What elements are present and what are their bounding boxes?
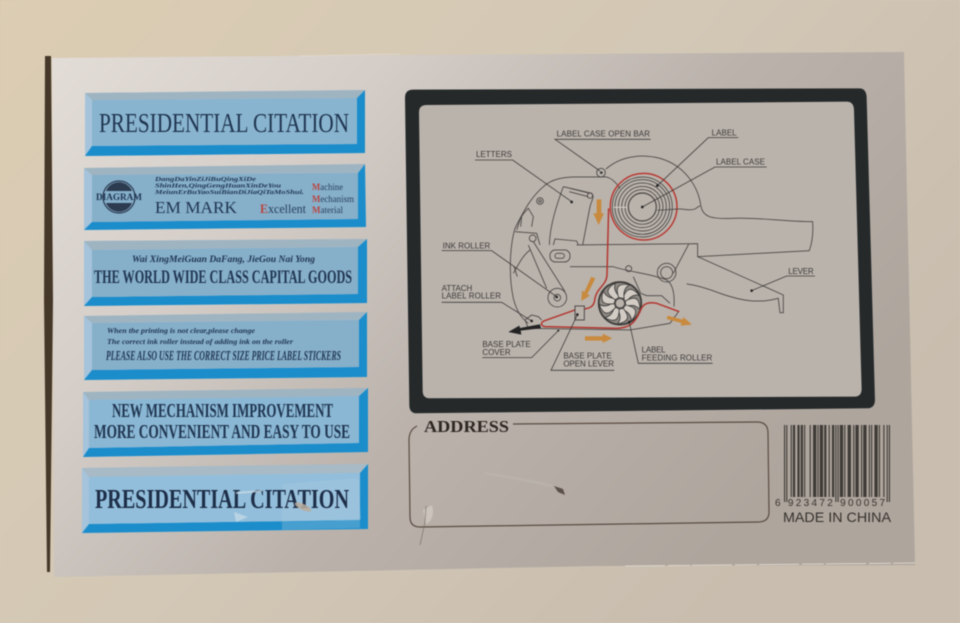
panel: address box [409, 417, 769, 527]
callout: label case [641, 158, 767, 208]
arrow: label out [508, 324, 541, 335]
warning text: PLEASE ALSO USE THE CORRECT SIZE PRICE LABEL STICKERS [106, 349, 341, 364]
subtitle: Wai XingMeiGuan DaFang, JieGou Nai Yong [132, 255, 315, 265]
heading: new mechanism improvement [94, 400, 350, 443]
open lever [575, 306, 584, 320]
callout: base plate cover: COVER [482, 348, 511, 357]
callout: label feeding roller: FEEDING ROLLER [642, 354, 713, 363]
callout: base plate open lever: BASE PLATE [563, 351, 612, 360]
feed wheel [597, 280, 644, 327]
callout: lever [750, 267, 815, 292]
tagline: excellent machine mechanism material: Material [312, 206, 343, 216]
small romanised text: ShinHen,QingGengHuanXinDeYou [155, 184, 282, 190]
callout: attach label roller: LABEL ROLLER [442, 291, 501, 300]
tagline: excellent machine mechanism material: Mechanism [312, 195, 355, 205]
callout: label [656, 128, 738, 187]
callout: base plate cover [482, 330, 559, 358]
made in china text: MADE IN CHINA [783, 509, 892, 525]
label paper path [542, 208, 679, 328]
icon: diagram logo [96, 181, 143, 213]
panel: presidential citation label [85, 90, 365, 156]
label roll [610, 173, 678, 240]
callout: base plate open lever [551, 313, 614, 370]
callout: letters [475, 150, 573, 203]
barcode [775, 425, 890, 509]
instruction text: When the printing is not clear,please change [107, 326, 256, 335]
callout: label: LABEL [712, 128, 737, 137]
heading: world wide class capital goods: THE WORLD WIDE CLASS CAPITAL GOODS [94, 267, 352, 288]
box panel [44, 52, 915, 577]
brand: em mark: EM MARK [155, 198, 238, 217]
panel: world wide class label [84, 239, 367, 306]
arrow: diagonal down [581, 277, 595, 301]
small romanised text: DangDaYinZiJiBuQingXiDe [154, 177, 256, 183]
tagline: excellent machine mechanism material [260, 183, 355, 216]
callout: label feeding roller [628, 321, 713, 363]
callout: attach label roller [442, 284, 533, 322]
callout: attach label roller: ATTACH [442, 284, 473, 293]
heading: new mechanism improvement: MORE CONVENIENT AND EASY TO USE [94, 421, 350, 443]
instruction text: The correct ink roller instead of adding ink on the roller [107, 337, 293, 346]
callout: base plate open lever: OPEN LEVER [563, 360, 614, 369]
callout: base plate cover: BASE PLATE [482, 340, 531, 349]
panel: new mechanism label [83, 388, 368, 457]
tagline: excellent machine mechanism material: Excellent [260, 202, 306, 216]
small romanised text: MeiunErBuYaoSuiBianDiJiaQiTaMoShui. [154, 190, 305, 196]
barcode number: 6 923472 900057 [775, 498, 885, 509]
panel: em mark label [84, 164, 366, 230]
arrow: exit right [667, 316, 692, 326]
callout: label case open bar: LABEL CASE OPEN BAR [557, 130, 650, 139]
heading: presidential citation bold: PRESIDENTIAL CITATION [95, 484, 349, 514]
icon: diagram logo: DIAGRAM [96, 192, 143, 202]
scuff marks [420, 473, 565, 545]
heading: presidential citation: PRESIDENTIAL CITATION [99, 108, 349, 138]
callout: label case: LABEL CASE [716, 158, 765, 167]
panel: mechanism diagram [405, 88, 875, 413]
panel: ink roller instructions label [84, 312, 367, 380]
heading: new mechanism improvement: NEW MECHANISM IMPROVEMENT [112, 400, 333, 422]
device outline [510, 156, 813, 330]
heading: address: ADDRESS [424, 417, 509, 436]
arrow: feed right [585, 334, 612, 343]
callout: ink roller [442, 241, 558, 298]
callout: label case open bar [555, 130, 651, 171]
instruction text [107, 326, 293, 346]
arrow: down [593, 199, 604, 225]
callout: letters: LETTERS [476, 150, 512, 159]
small romanised text [154, 177, 305, 196]
callout: lever: LEVER [788, 267, 814, 276]
callout: ink roller: INK ROLLER [443, 241, 491, 250]
tagline: excellent machine mechanism material: Machine [312, 183, 343, 193]
panel: presidential citation label lower [82, 464, 368, 533]
callout: label feeding roller: LABEL [642, 346, 666, 355]
